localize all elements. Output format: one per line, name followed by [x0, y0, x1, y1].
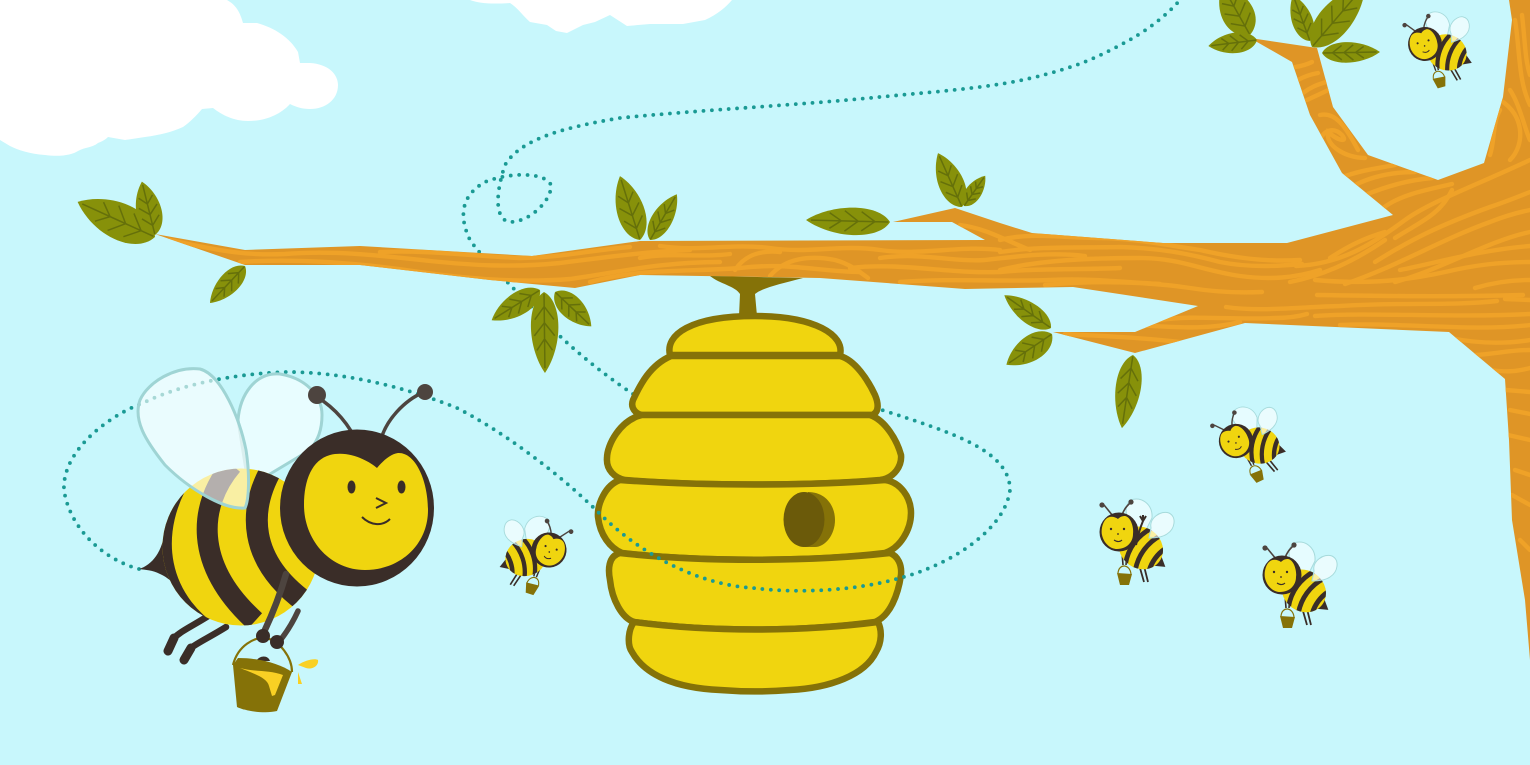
leaf cluster: top right twig [1207, 0, 1380, 63]
leaf cluster: middle twig [806, 148, 992, 236]
beehive [598, 276, 911, 692]
flight path: dotted trail behind the hive [463, 0, 1180, 394]
cloud: top left [0, 0, 338, 156]
leaf cluster: above the branch [607, 172, 686, 245]
body with stripes [162, 468, 315, 626]
bucket [233, 638, 318, 712]
small bee: right middle [1208, 392, 1303, 491]
hive tiers [598, 316, 911, 692]
leaf cluster: left branch tip [70, 179, 253, 310]
front arms [264, 574, 298, 638]
tree branch [155, 0, 1530, 660]
flight path: dotted trail in front of the hive [64, 372, 1010, 591]
small bee: lower right [1262, 542, 1342, 628]
leaf cluster: below the branch [486, 280, 599, 373]
hive stem [710, 276, 803, 316]
hive entrance [784, 492, 835, 547]
stinger [139, 528, 190, 600]
small bee: waving [1099, 499, 1179, 585]
head [280, 430, 434, 586]
small bee: top right [1401, 3, 1487, 93]
leaf cluster: lower twig [998, 287, 1146, 430]
back wing [238, 374, 322, 480]
antennae [308, 384, 433, 445]
cloud: top centre [470, 0, 732, 33]
big bee [138, 369, 434, 712]
back legs [168, 611, 226, 660]
front wing [138, 369, 249, 508]
small bee: near hive [483, 505, 575, 601]
face [304, 453, 428, 570]
